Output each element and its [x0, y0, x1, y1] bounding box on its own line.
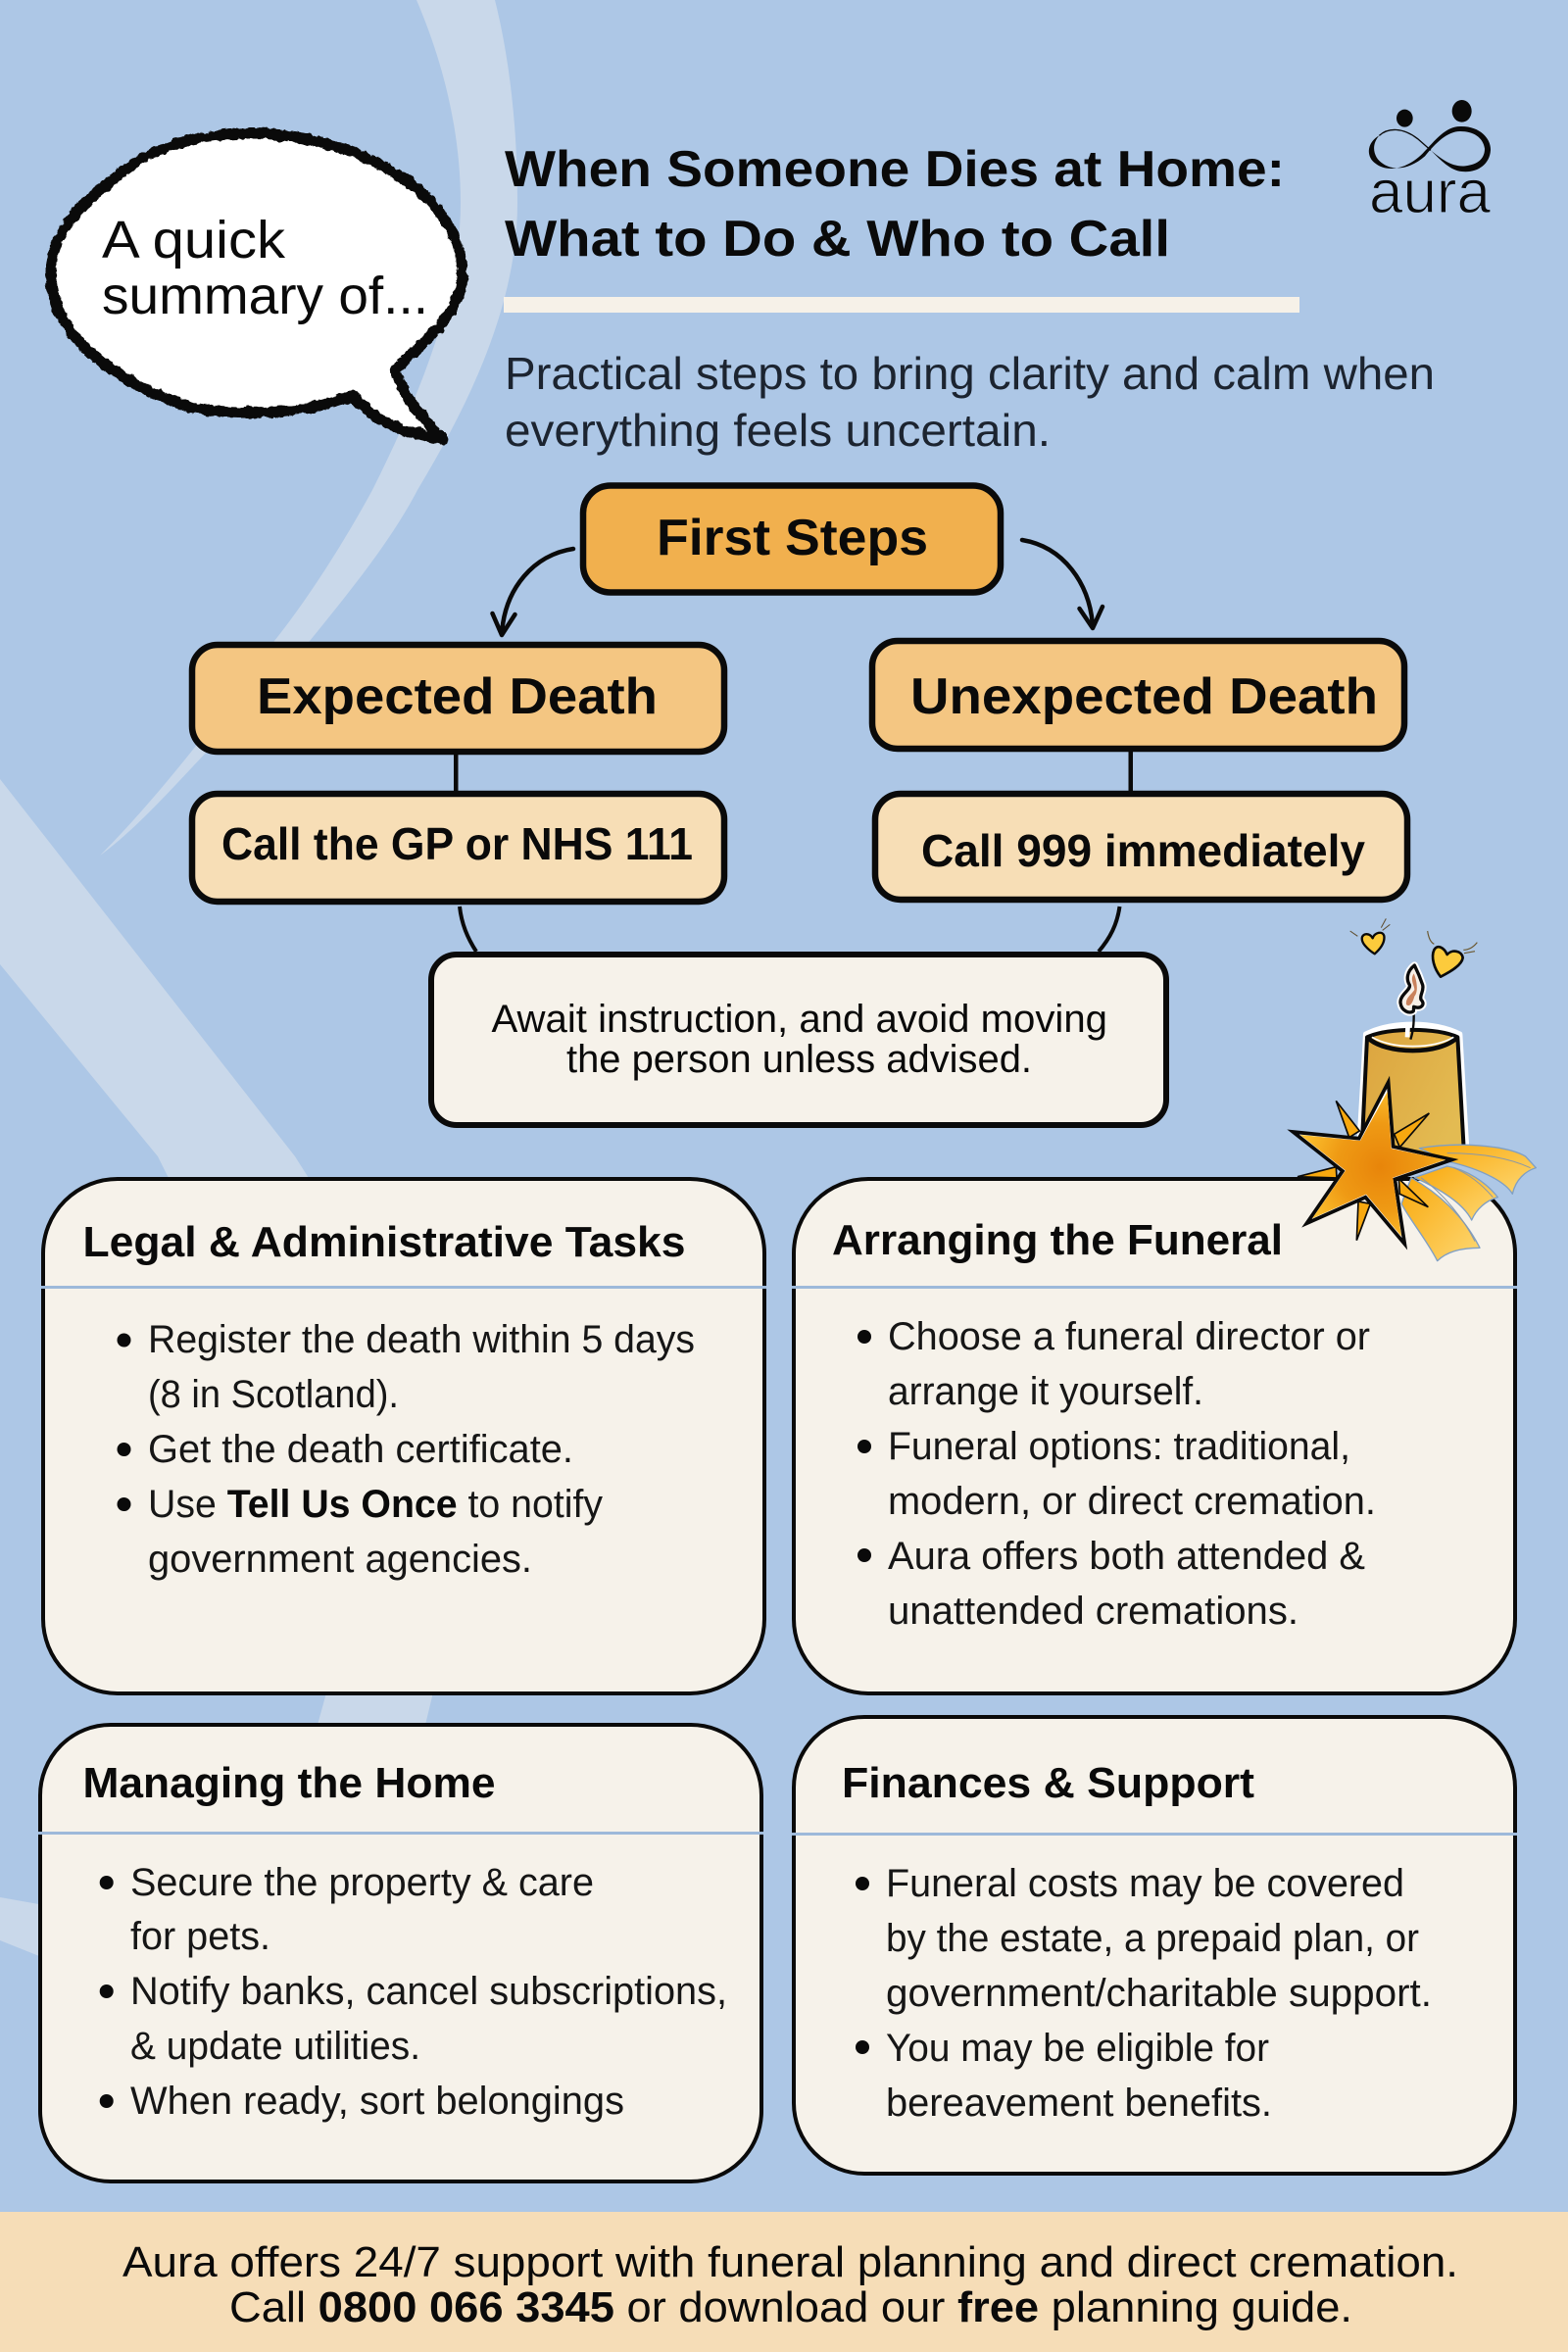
list: legal: (8 in Scotland). [148, 1373, 399, 1416]
title [505, 141, 1285, 268]
icon: flame [1400, 965, 1423, 1012]
subtitle: everything feels uncertain. [505, 405, 1051, 456]
connector: expected to GP [454, 755, 459, 792]
box: await instruction: Await instruction, and avoid moving [492, 998, 1107, 1041]
heading: home: Managing the Home [82, 1759, 496, 1807]
list: finances: government/charitable support. [886, 1972, 1432, 2015]
list: home: Notify banks, cancel subscriptions, [130, 1970, 727, 2013]
connector: GP to await box [460, 906, 476, 952]
box: await instruction [431, 955, 1166, 1125]
list: finances: bereavement benefits. [886, 2082, 1272, 2125]
list: funeral: arrange it yourself. [888, 1370, 1203, 1413]
icon: star burst spikes [1298, 1101, 1429, 1241]
connector: unexpected to 999 [1129, 751, 1133, 792]
box: unexpected death [872, 641, 1404, 749]
icon: star tail ribbons [1401, 1145, 1536, 1261]
box: first steps [583, 486, 1001, 592]
list: funeral: Choose a funeral director or [888, 1315, 1370, 1358]
arrow: first steps to unexpected death [1022, 540, 1102, 628]
panel: managing the home [38, 1725, 763, 2181]
list: legal: Get the death certificate. [148, 1428, 573, 1471]
panel: legal and administrative tasks [41, 1179, 766, 1693]
illustration: candle with star and hearts [1293, 918, 1536, 1261]
icon: star [1293, 1082, 1452, 1244]
list: home: & update utilities. [130, 2025, 420, 2068]
list: finances: Funeral costs may be covered [886, 1862, 1404, 1905]
panel: arranging the funeral [792, 1179, 1517, 1693]
footer banner: Aura offers 24/7 support with funeral planning and direct cremation. [122, 2238, 1458, 2286]
list: finances [856, 1862, 1432, 2125]
list: home [100, 1861, 727, 2123]
list: legal: Use Tell Us Once to notify [148, 1483, 603, 1526]
list: legal [118, 1318, 695, 1581]
box: unexpected death: Unexpected Death [910, 668, 1378, 725]
list: funeral [858, 1315, 1376, 1633]
footer banner: Call 0800 066 3345 or download our free planning guide. [229, 2283, 1352, 2331]
box: call 999 [875, 794, 1407, 900]
heading: legal: Legal & Administrative Tasks [82, 1218, 686, 1266]
box: await instruction: the person unless advised. [566, 1038, 1032, 1081]
panel: finances and support [792, 1717, 1517, 2174]
title: What to Do & Who to Call [505, 211, 1170, 268]
box: call GP [192, 794, 724, 902]
speech bubble: summary of... [102, 267, 428, 325]
box: call GP: Call the GP or NHS 111 [221, 818, 693, 869]
list: home: Secure the property & care [130, 1861, 594, 1904]
bubble text: A quick [102, 211, 286, 270]
subtitle: Practical steps to bring clarity and calm when [505, 348, 1435, 399]
heading: funeral: Arranging the Funeral [832, 1216, 1283, 1264]
box: first steps: First Steps [657, 510, 928, 566]
heading: finances: Finances & Support [842, 1759, 1254, 1807]
box: call 999: Call 999 immediately [921, 825, 1365, 876]
list: finances: You may be eligible for [886, 2027, 1269, 2070]
icon: large heart [1428, 931, 1477, 977]
arrow: first steps to expected death [492, 549, 573, 635]
list: home: When ready, sort belongings [130, 2080, 624, 2123]
title underline [504, 297, 1299, 313]
list: finances: by the estate, a prepaid plan, or [886, 1917, 1419, 1960]
list: funeral: Aura offers both attended & [888, 1535, 1365, 1578]
icon: candle [1358, 1006, 1467, 1154]
list: home: for pets. [130, 1915, 270, 1958]
title: When Someone Dies at Home: [505, 141, 1285, 198]
speech bubble [51, 133, 463, 439]
list: funeral: Funeral options: traditional, [888, 1425, 1350, 1468]
box: expected death: Expected Death [257, 668, 658, 725]
list: legal: government agencies. [148, 1538, 532, 1581]
icon: small heart [1350, 918, 1390, 954]
subtitle [505, 348, 1435, 456]
list: funeral: modern, or direct cremation. [888, 1480, 1376, 1523]
logo: aura: aura [1369, 159, 1492, 226]
box: expected death [192, 645, 724, 752]
connector: 999 to await box [1099, 906, 1119, 952]
logo: aura [1369, 100, 1492, 226]
list: funeral: unattended cremations. [888, 1590, 1298, 1633]
footer banner [0, 2212, 1568, 2352]
list: legal: Register the death within 5 days [148, 1318, 695, 1361]
